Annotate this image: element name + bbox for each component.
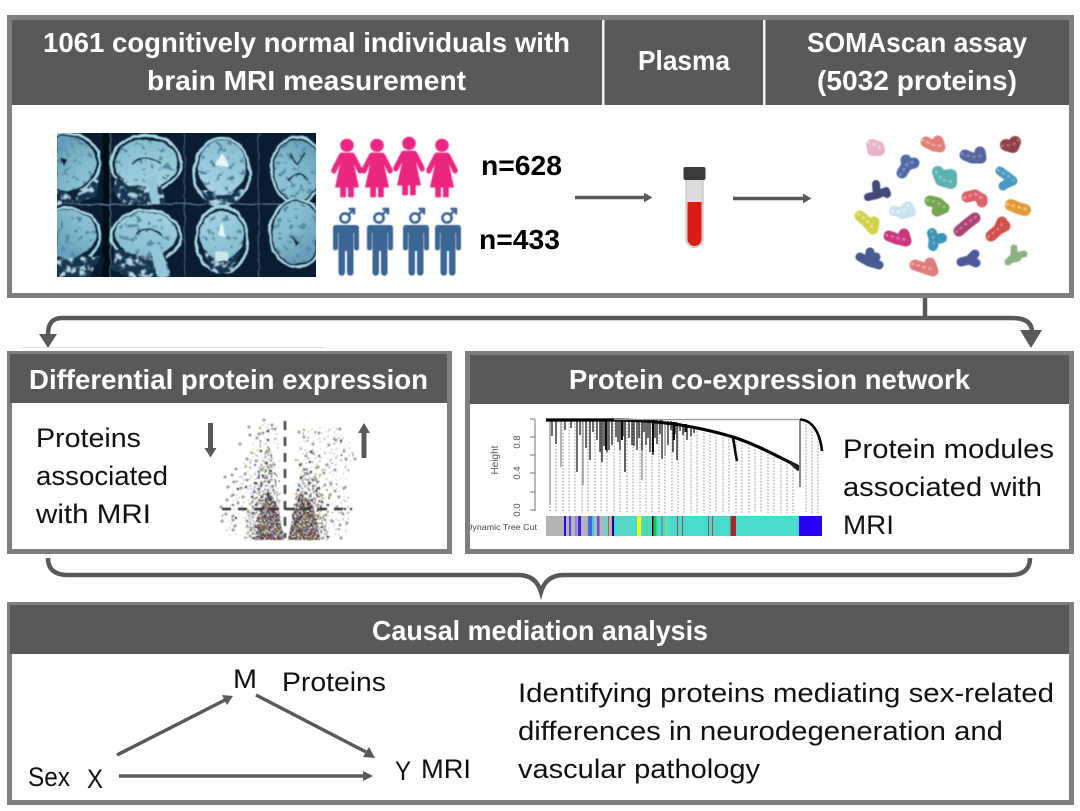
panel: differential protein expression bbox=[10, 354, 450, 552]
heading: cohort: 1061 cognitively normal individuals with bbox=[43, 27, 570, 58]
arrow: plasma to proteins bbox=[733, 194, 812, 203]
heading: cohort: brain MRI measurement bbox=[147, 65, 466, 96]
bracket: combining analyses bbox=[48, 558, 1030, 592]
connector: assay to both analyses bbox=[39, 298, 1042, 348]
icon: blood tube bbox=[684, 167, 706, 248]
icon: men bbox=[333, 209, 461, 276]
text: protein modules associated with MRI: Protein modules bbox=[843, 434, 1054, 464]
icon: protein cluster bbox=[858, 140, 1029, 271]
node: Y MRI: MRI bbox=[421, 754, 471, 784]
node: Sex X: X bbox=[87, 764, 103, 794]
heading: Protein co-expression network bbox=[569, 364, 970, 395]
arrow: X to M bbox=[117, 695, 233, 755]
panel: causal mediation analysis bbox=[10, 604, 1072, 802]
dendrogram leaves bbox=[550, 420, 818, 513]
heading: assay: (5032 proteins) bbox=[817, 65, 1017, 96]
header bar: top panel bbox=[12, 20, 1069, 105]
arrow: M to Y bbox=[256, 695, 375, 758]
diagram: mediation triangle bbox=[28, 664, 471, 794]
heading: Causal mediation analysis bbox=[372, 615, 708, 646]
node: Y MRI bbox=[395, 754, 471, 786]
arrow: X to Y bbox=[119, 771, 373, 781]
text: protein modules associated with MRI: MRI bbox=[843, 510, 894, 540]
axis: 0.4 bbox=[512, 466, 523, 480]
axis: 0.0 bbox=[512, 503, 523, 517]
faint rule above left panel bbox=[23, 347, 325, 348]
text: mediation finding: differences in neurodegeneration and bbox=[518, 716, 1003, 746]
dendrogram branches bbox=[550, 420, 737, 505]
icon: women bbox=[331, 137, 458, 197]
node: Y MRI: Y bbox=[395, 756, 411, 786]
panel: protein co-expression network bbox=[466, 354, 1072, 552]
text: mediation finding: vascular pathology bbox=[518, 754, 761, 784]
image: brain MRI scans bbox=[57, 133, 316, 277]
text: mediation finding bbox=[518, 678, 1054, 784]
header bar bbox=[10, 354, 447, 403]
text: mediation finding: Identifying proteins mediating sex-related bbox=[518, 678, 1054, 708]
chart: dendrogram with module colours bbox=[466, 419, 822, 536]
node: M Proteins: Proteins bbox=[282, 667, 386, 697]
icon: down arrow bbox=[204, 423, 216, 458]
text: protein modules associated with MRI: associated with bbox=[843, 472, 1042, 502]
heading: plasma: Plasma bbox=[638, 45, 730, 76]
header bar bbox=[10, 605, 1069, 654]
module colour bar bbox=[546, 516, 822, 536]
node: M Proteins: M bbox=[233, 664, 257, 694]
text: proteins associated with MRI: with MRI bbox=[35, 499, 151, 529]
text: proteins associated with MRI: associated bbox=[36, 461, 168, 491]
node: Sex X: Sex bbox=[28, 762, 70, 792]
axis: Height bbox=[490, 445, 501, 474]
arrow: cohort to plasma bbox=[575, 193, 652, 202]
text: proteins associated with MRI bbox=[35, 423, 168, 529]
header bar bbox=[470, 355, 1069, 404]
central features bbox=[132, 153, 308, 235]
faces bbox=[57, 176, 244, 277]
node: M Proteins bbox=[233, 664, 386, 697]
axis: 0.8 bbox=[512, 435, 523, 449]
heading: assay bbox=[807, 27, 1027, 96]
heading: cohort bbox=[43, 27, 570, 96]
axis bbox=[490, 419, 535, 517]
chart: volcano plot bbox=[215, 415, 360, 543]
label: n=628: n=628 bbox=[481, 150, 562, 181]
node: Sex X bbox=[28, 762, 103, 794]
header divider right bbox=[763, 20, 766, 105]
header divider left bbox=[602, 20, 604, 105]
text: proteins associated with MRI: Proteins bbox=[36, 423, 141, 453]
text: protein modules associated with MRI bbox=[843, 434, 1054, 540]
brains bbox=[57, 133, 316, 277]
label: Dynamic Tree Cut: Dynamic Tree Cut bbox=[466, 522, 538, 532]
icon: up arrow bbox=[358, 423, 370, 458]
label: n=433: n=433 bbox=[479, 224, 560, 255]
skulls bbox=[57, 133, 102, 194]
heading: Differential protein expression bbox=[29, 364, 428, 395]
heading: assay: SOMAscan assay bbox=[807, 27, 1027, 58]
panel: cohort, plasma and assay bbox=[10, 18, 1072, 296]
